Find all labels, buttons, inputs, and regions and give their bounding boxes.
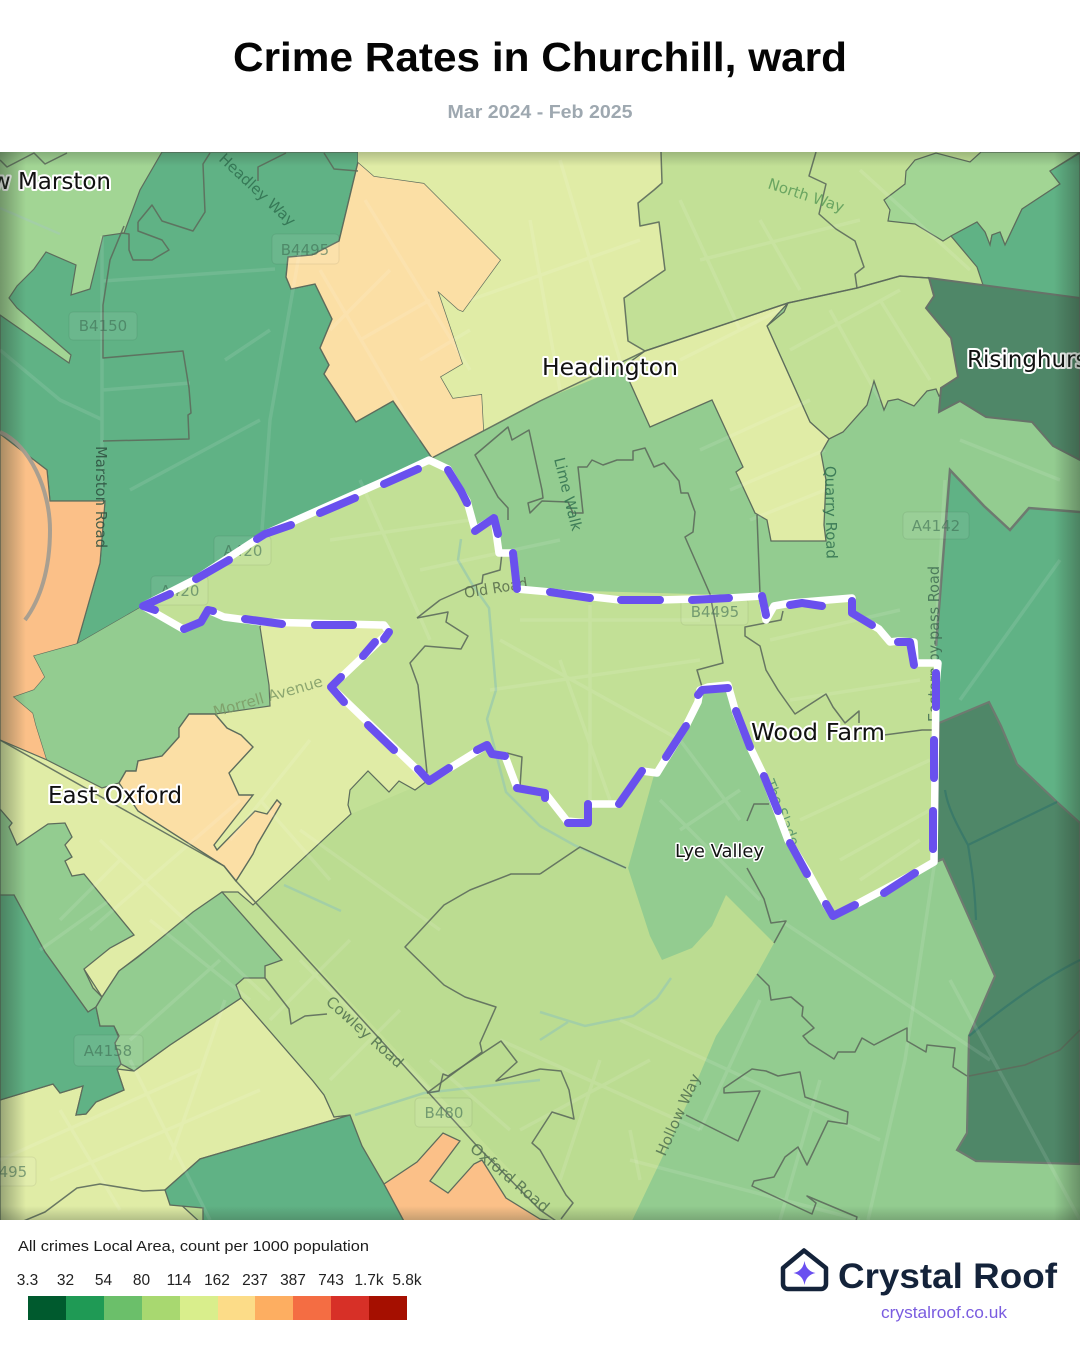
road plate: B480: B480 <box>425 1104 463 1122</box>
legend title: All crimes Local Area, count per 1000 population <box>18 1238 369 1255</box>
road plate: B4495 centre <box>681 599 748 625</box>
choropleth map <box>0 150 1080 1225</box>
road plate: A420 upper: A420 <box>224 542 262 560</box>
rivers and streams <box>0 208 671 1115</box>
road plate: B480 <box>415 1098 472 1127</box>
road label: Hollow Way: Hollow Way <box>652 1071 704 1159</box>
road label: Old Road: Old Road <box>463 574 529 602</box>
road plate: A4142: A4142 <box>912 517 960 535</box>
ward and tract boundary lines <box>0 152 1080 1225</box>
road plate: A420 lower: A420 <box>161 582 199 600</box>
website link: crystalroof.co.uk <box>881 1304 1008 1322</box>
legend tick labels: 1.7k <box>354 1272 384 1289</box>
legend tick labels: 237 <box>242 1272 268 1289</box>
zone: south-east darkest <box>936 702 1080 1164</box>
zone: Marston dark green <box>0 152 432 644</box>
date range subtitle: Mar 2024 - Feb 2025 <box>448 101 632 122</box>
road plate: A420 lower <box>151 576 208 605</box>
logo: house icon with star <box>783 1250 826 1289</box>
zone: East Oxford orange-yellow <box>119 714 281 881</box>
zone: south-west pale tract <box>0 998 350 1225</box>
legend tick labels <box>17 1272 422 1289</box>
legend tick labels: 32 <box>57 1272 74 1289</box>
legend colour scale <box>28 1296 407 1320</box>
legend tick labels: 54 <box>95 1272 112 1289</box>
zone: city centre orange <box>0 434 105 760</box>
ward boundary: white line <box>143 460 938 916</box>
zone: north-west light green <box>0 152 161 362</box>
road plate: A420 upper <box>214 536 271 565</box>
legend tick labels: 3.3 <box>17 1272 38 1289</box>
zone: east of Headington pale green <box>767 276 958 439</box>
zone: east dark green wedge <box>936 470 1080 823</box>
logo wordmark: Crystal Roof <box>838 1257 1057 1296</box>
road label: Eastern by-pass Road: Eastern by-pass Road <box>925 566 943 722</box>
zone: south dark green <box>165 1115 406 1225</box>
place label: Headington: Headington <box>542 355 678 381</box>
road label: Marston Road: Marston Road <box>92 446 110 548</box>
road label: The Slade: The Slade <box>760 776 803 848</box>
streams in darkest zone <box>945 790 1080 1036</box>
place label: Lye Valley: Lye Valley <box>675 841 764 862</box>
zone: south of ward slightly deeper green <box>236 745 774 1225</box>
road label: Headley Way: Headley Way <box>215 150 299 230</box>
zone: East Oxford pale yellow-green <box>0 622 427 997</box>
Headington tract outline <box>624 152 665 351</box>
zone: Quarry pale tract <box>623 303 829 541</box>
legend tick labels: 114 <box>167 1272 192 1289</box>
road label: Quarry Road: Quarry Road <box>821 466 841 559</box>
road plate: A4158: A4158 <box>84 1042 132 1060</box>
wedge outline <box>936 470 1080 646</box>
zone: A4158 dark green <box>0 895 124 1115</box>
zone: Cowley mid green <box>96 892 282 1071</box>
legend tick labels: 743 <box>318 1272 344 1289</box>
road label: Lime Walk: Lime Walk <box>550 456 586 533</box>
road plate: B4495 north: B4495 <box>281 241 329 259</box>
map edge vignette <box>0 152 1080 1220</box>
road plate: B4495 north <box>272 234 339 264</box>
zone: north-east light green <box>884 152 1080 245</box>
zone: Headington pale tract <box>358 152 665 458</box>
ring road on city centre <box>0 432 50 620</box>
legend tick labels: 80 <box>133 1272 150 1289</box>
place label: East Oxford: East Oxford <box>48 783 182 809</box>
place label: Wood Farm: Wood Farm <box>751 720 885 746</box>
ward boundary: purple dashes <box>143 469 936 916</box>
title: Crime Rates in Churchill, ward <box>233 34 847 80</box>
legend tick labels: 387 <box>280 1272 306 1289</box>
map base: moderate crime areas <box>88 152 982 1220</box>
zone: north-east dark green <box>951 153 1080 298</box>
road label: North Way: North Way <box>766 175 847 216</box>
road plate: B4495 south-west <box>0 1157 36 1186</box>
zone: central-east mid green <box>432 303 1080 1225</box>
zone: west mid green <box>0 809 134 1012</box>
legend tick labels: 162 <box>204 1272 230 1289</box>
road plate: A4158 <box>74 1035 143 1066</box>
zone: north yellow tract <box>286 162 501 458</box>
road label: Morrell Avenue: Morrell Avenue <box>211 672 325 721</box>
road plate: A4142 <box>903 512 969 539</box>
road plate: B4495 centre: B4495 <box>691 603 739 621</box>
road label: Oxford Road: Oxford Road <box>466 1139 553 1216</box>
road plate: B4150: B4150 <box>79 317 127 335</box>
zone: Risinghurst darkest <box>926 278 1080 460</box>
zone: south orange <box>383 1132 552 1220</box>
legend tick labels: 5.8k <box>392 1272 422 1289</box>
road plate: B4150 <box>69 312 137 340</box>
street network <box>0 160 1080 1220</box>
road label: Cowley Road: Cowley Road <box>322 993 407 1072</box>
zone: south-west of ward mid green <box>14 606 270 788</box>
